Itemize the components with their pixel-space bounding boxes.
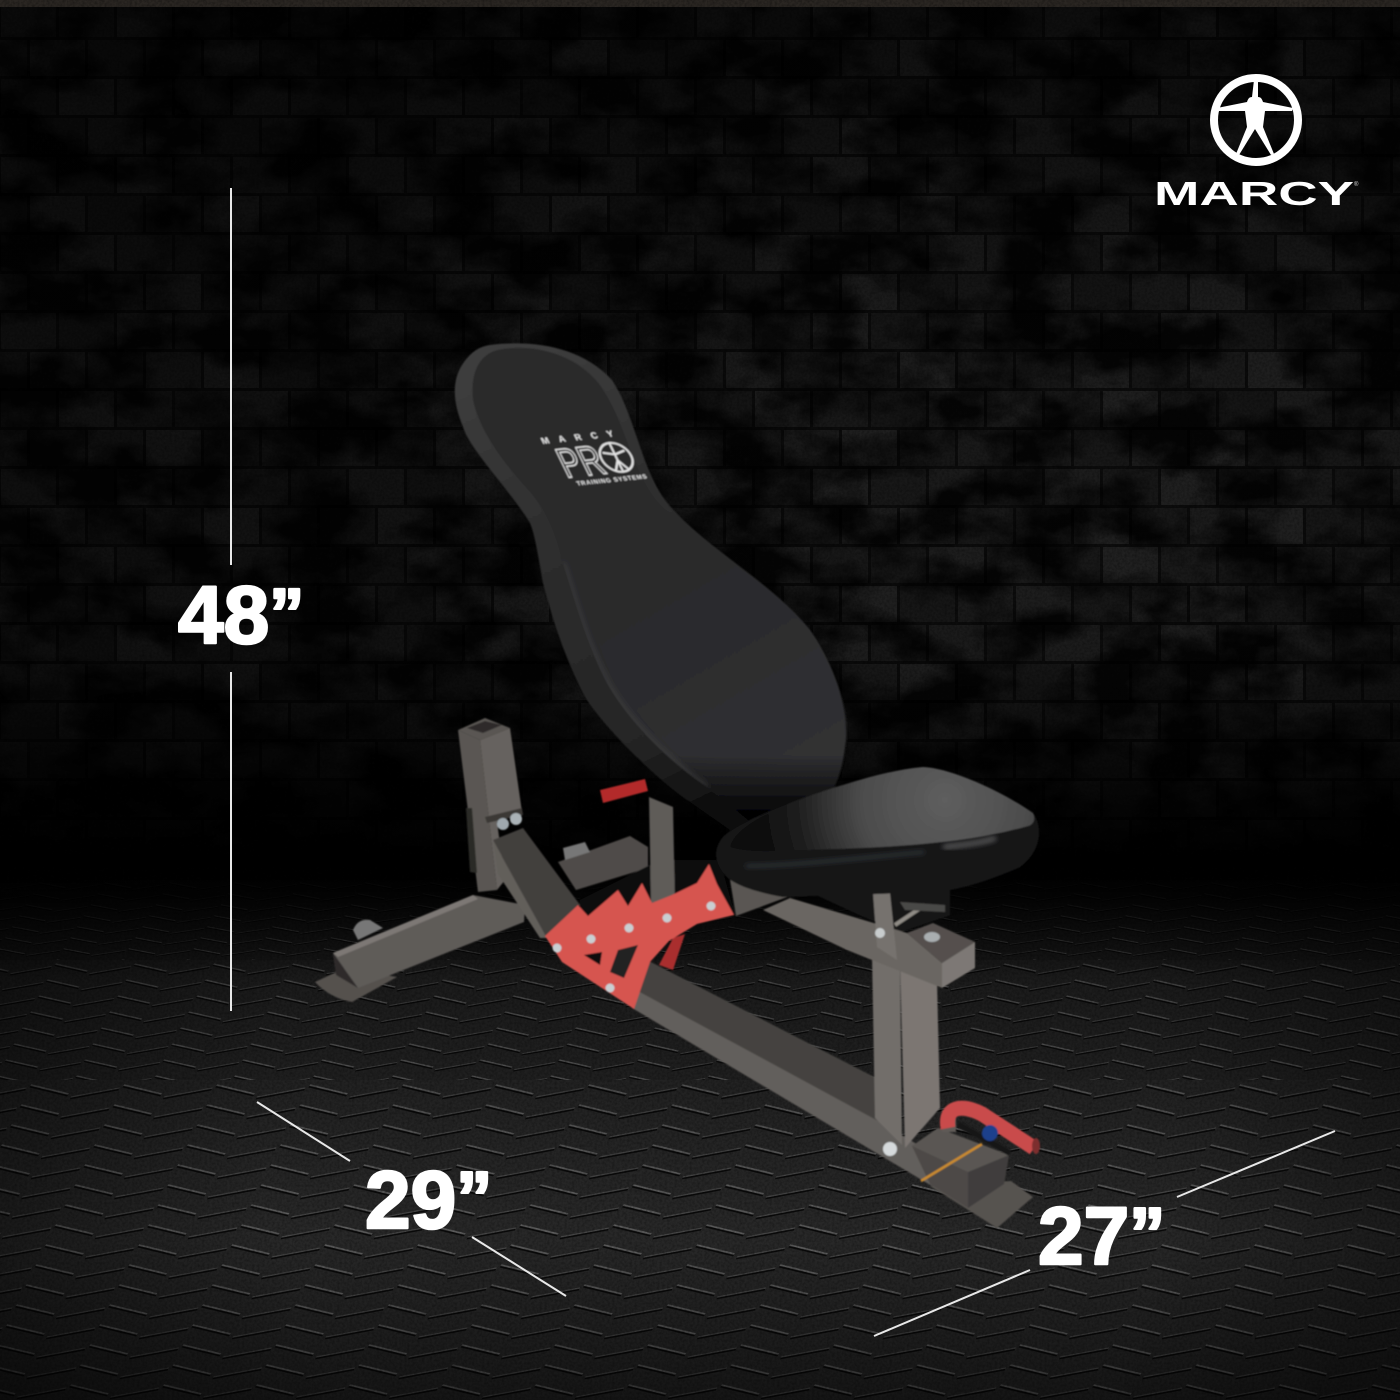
height label: 48 <box>178 570 269 661</box>
rear base tube and foot <box>315 836 648 1002</box>
seat adjust mechanism <box>810 888 950 932</box>
branding: PR: PR <box>549 438 613 487</box>
rear diagonal arm <box>485 808 580 938</box>
red adjuster plate <box>545 864 734 1009</box>
back rest outer side <box>455 343 848 832</box>
background: diamond-plate floor <box>0 860 1400 1400</box>
width line lower <box>874 1270 1030 1336</box>
back rest cushion <box>455 343 870 850</box>
length line upper <box>257 1102 350 1161</box>
front upright post <box>872 955 940 1148</box>
length label: 29 <box>365 1155 456 1246</box>
dimension: height 48 inches <box>178 188 304 1011</box>
main rail <box>632 959 935 1186</box>
logo wordmark: MARCY <box>1154 175 1354 212</box>
width label: 27 <box>1038 1191 1129 1282</box>
length line lower <box>472 1237 566 1296</box>
length label: ” <box>456 1158 492 1238</box>
dimension: width 27 inches <box>874 1131 1335 1336</box>
back rest front face <box>472 348 846 830</box>
registered mark: ® <box>1354 181 1359 188</box>
rear upright post <box>458 718 522 892</box>
background: brick wall <box>0 0 1400 900</box>
seat rim highlight <box>943 838 996 847</box>
branding: training systems: TRAINING SYSTEMS <box>575 474 648 487</box>
weight bench <box>315 343 1040 1228</box>
front base foot and block <box>912 1110 1033 1228</box>
logo: Marcy <box>1154 78 1359 212</box>
front orange line <box>921 1144 982 1181</box>
branding: O with figure <box>594 441 638 473</box>
width line upper <box>1177 1131 1335 1197</box>
front red handle <box>947 1108 1040 1154</box>
back rest branding <box>539 428 648 489</box>
seat top surface <box>730 767 1034 851</box>
under-seat cross bar <box>730 880 975 988</box>
logo ring with figure <box>1214 78 1298 162</box>
dimension: length 29 inches <box>257 1102 566 1296</box>
height line upper <box>230 188 232 565</box>
seat cushion <box>716 767 1039 897</box>
teeth backing <box>580 860 735 930</box>
seat body and rim <box>716 767 1039 897</box>
back red lever <box>600 779 648 803</box>
branding: MARCY: MARCY <box>539 429 616 446</box>
width label: ” <box>1129 1194 1165 1274</box>
back rest support post <box>649 797 675 905</box>
height line lower <box>230 672 232 1011</box>
seat rim seam <box>745 852 925 866</box>
height label: ” <box>269 574 304 652</box>
